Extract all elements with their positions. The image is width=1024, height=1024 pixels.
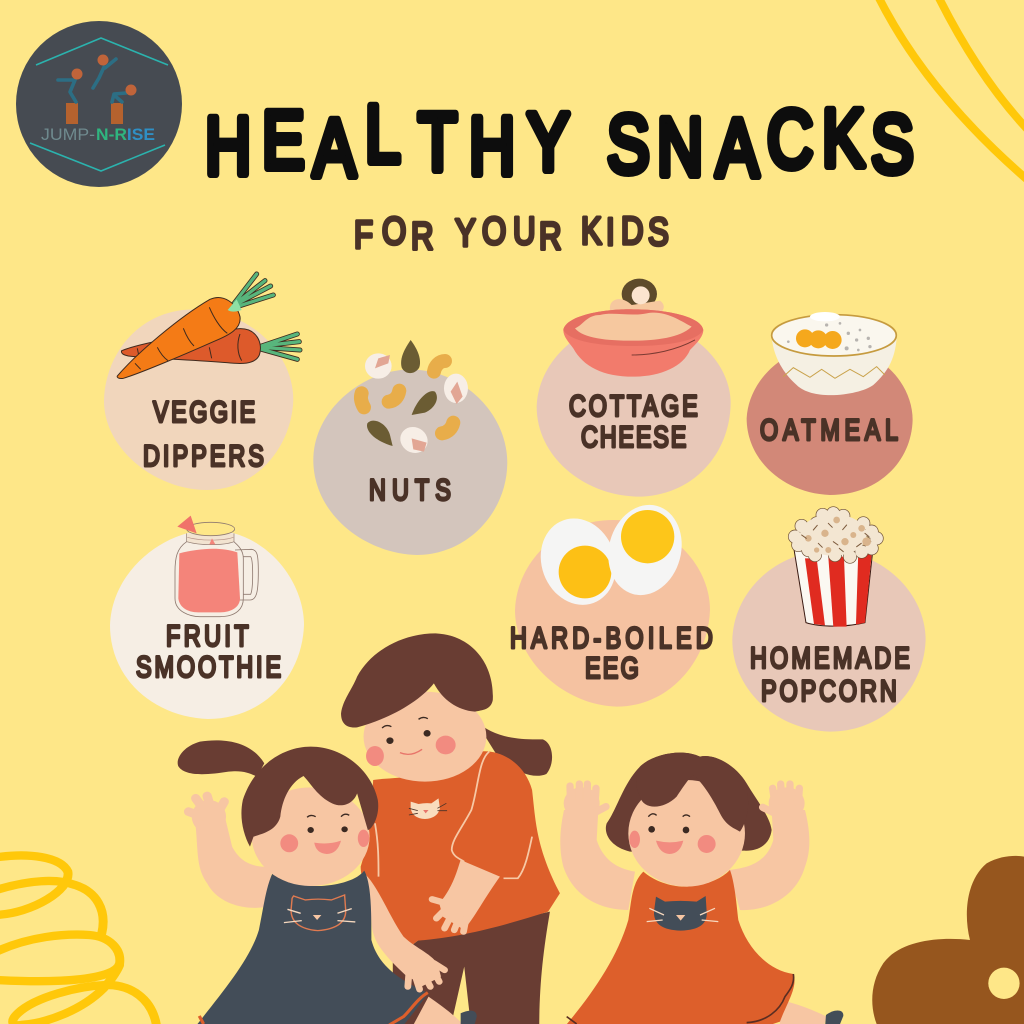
illustration: mother	[341, 633, 560, 1024]
decoration: bottom-right brown flower	[872, 856, 1024, 1024]
panel: fruit smoothie: FRUIT	[166, 619, 249, 653]
panel: cottage cheese	[537, 279, 731, 497]
title: HEALTHY SNACKS	[205, 87, 914, 194]
illustration: girl in orange dress	[560, 753, 843, 1024]
logo: Jump-N-Rise badge	[16, 21, 182, 187]
panel: oatmeal	[747, 312, 913, 495]
panel: fruit smoothie	[110, 516, 304, 719]
decoration: top-right curved lines	[878, 0, 1024, 182]
panel: hard-boiled egg: HARD-BOILED	[510, 621, 713, 655]
panel: nuts	[313, 340, 507, 555]
panel: cottage cheese: COTTAGE	[569, 389, 698, 423]
subtitle: FOR YOUR KIDS	[354, 210, 669, 258]
panel: veggie dippers: VEGGIE	[153, 395, 255, 429]
panel: hard-boiled egg: EEG	[585, 651, 639, 685]
logo: Jump-N-Rise badge: N-RISE	[96, 125, 155, 144]
panel: veggie dippers	[104, 274, 300, 490]
illustration: girl in navy dress	[178, 740, 477, 1024]
logo: Jump-N-Rise badge: JUMP-	[41, 125, 95, 144]
decoration: bottom-left yellow spiral	[0, 855, 157, 1024]
panel: fruit smoothie: SMOOTHIE	[136, 650, 281, 684]
icon: smoothie jar	[175, 516, 258, 617]
panel: homemade popcorn	[732, 506, 926, 732]
panel: cottage cheese: CHEESE	[581, 420, 686, 454]
panel: hard-boiled egg	[510, 497, 713, 707]
panel: oatmeal: OATMEAL	[760, 413, 898, 447]
panel: homemade popcorn: HOMEMADE	[750, 641, 910, 675]
panel: veggie dippers: DIPPERS	[143, 439, 264, 473]
panel: nuts: NUTS	[369, 473, 451, 507]
panel: homemade popcorn: POPCORN	[761, 674, 897, 708]
